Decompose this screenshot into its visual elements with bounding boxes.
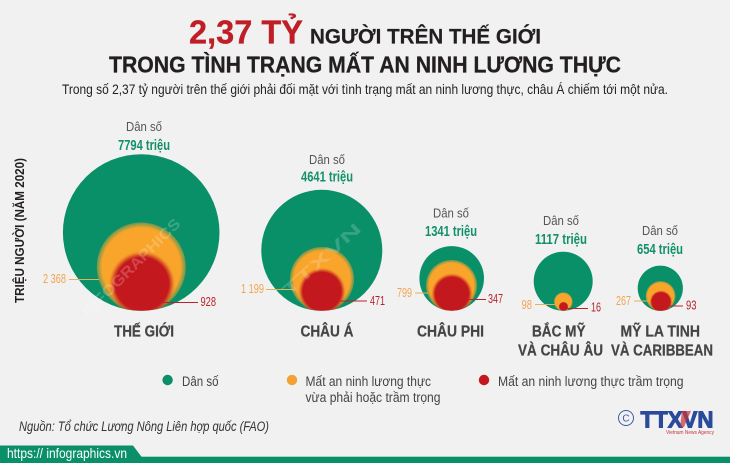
panel: latin america and caribbean: VÀ CARIBBEAN xyxy=(611,340,713,360)
footer bar: https:// infographics.vn xyxy=(7,445,127,461)
panel: asia: 1 199 xyxy=(241,281,264,296)
panel: africa xyxy=(397,206,503,340)
panel: asia: CHÂU Á xyxy=(300,322,354,340)
panel: asia: 471 xyxy=(370,293,385,308)
title: 2,37 TỶ xyxy=(189,14,303,50)
panel: latin america and caribbean: 267 xyxy=(616,293,631,308)
panel: africa: 1341 triệu xyxy=(425,223,477,240)
panel: asia: TTXVN xyxy=(279,220,365,300)
logo: TTXVN xyxy=(618,406,714,436)
logo: TTXVN: Vietnam News Agency xyxy=(666,430,714,436)
legend xyxy=(162,374,683,405)
legend: Mất an ninh lương thực xyxy=(306,374,431,389)
footer bar xyxy=(0,445,730,463)
panel: latin america and caribbean: 654 triệu xyxy=(637,241,683,258)
panel: africa: CHÂU PHI xyxy=(417,322,484,340)
panel: latin america and caribbean xyxy=(611,223,713,360)
panel: asia: Dân số xyxy=(309,152,345,167)
panel: world: 7794 triệu xyxy=(118,137,170,154)
panel: latin america and caribbean: MỸ LA TINH xyxy=(620,320,700,340)
panel: world: 928 xyxy=(200,294,216,309)
panel: africa: 799 xyxy=(397,285,412,300)
panel: north america and europe: VÀ CHÂU ÂU xyxy=(518,340,603,360)
panel: world: INFOGRAPHICS xyxy=(79,215,184,321)
panel: north america and europe: Dân số xyxy=(543,213,579,228)
panel: latin america and caribbean: Dân số xyxy=(642,223,678,238)
source: Nguồn: Tổ chức Lương Nông Liên hợp quốc (FAO) xyxy=(19,419,269,434)
panel: north america and europe: BẮC MỸ xyxy=(532,320,586,340)
panel: world: THẾ GIỚI xyxy=(114,322,174,340)
panel: north america and europe: 98 xyxy=(522,297,532,312)
panel: north america and europe: 1117 triệu xyxy=(535,231,587,248)
panel: asia xyxy=(241,152,385,340)
panel: asia: 4641 triệu xyxy=(301,168,353,186)
legend: Dân số xyxy=(182,374,219,389)
panel: africa: 347 xyxy=(488,291,503,306)
legend: Mất an ninh lương thực trầm trọng xyxy=(498,374,684,389)
title: TRONG TÌNH TRẠNG MẤT AN NINH LƯƠNG THỰC xyxy=(109,50,621,77)
title xyxy=(109,14,621,77)
panel: north america and europe xyxy=(518,213,603,360)
panel: world: Dân số xyxy=(126,119,162,134)
panel: africa: Dân số xyxy=(433,206,469,220)
logo: TTXVN: TTXVN xyxy=(640,406,714,432)
title: NGƯỜI TRÊN THẾ GIỚI xyxy=(310,24,541,48)
legend: vừa phải hoặc trầm trọng xyxy=(306,390,440,405)
panel: world xyxy=(43,119,220,340)
panel: north america and europe: 16 xyxy=(591,300,601,314)
axis label: TRIỆU NGƯỜI (NĂM 2020) xyxy=(12,158,27,303)
panel: world: 2 368 xyxy=(43,271,66,286)
logo: TTXVN: C xyxy=(622,414,630,424)
panel: latin america and caribbean: 93 xyxy=(686,298,696,312)
